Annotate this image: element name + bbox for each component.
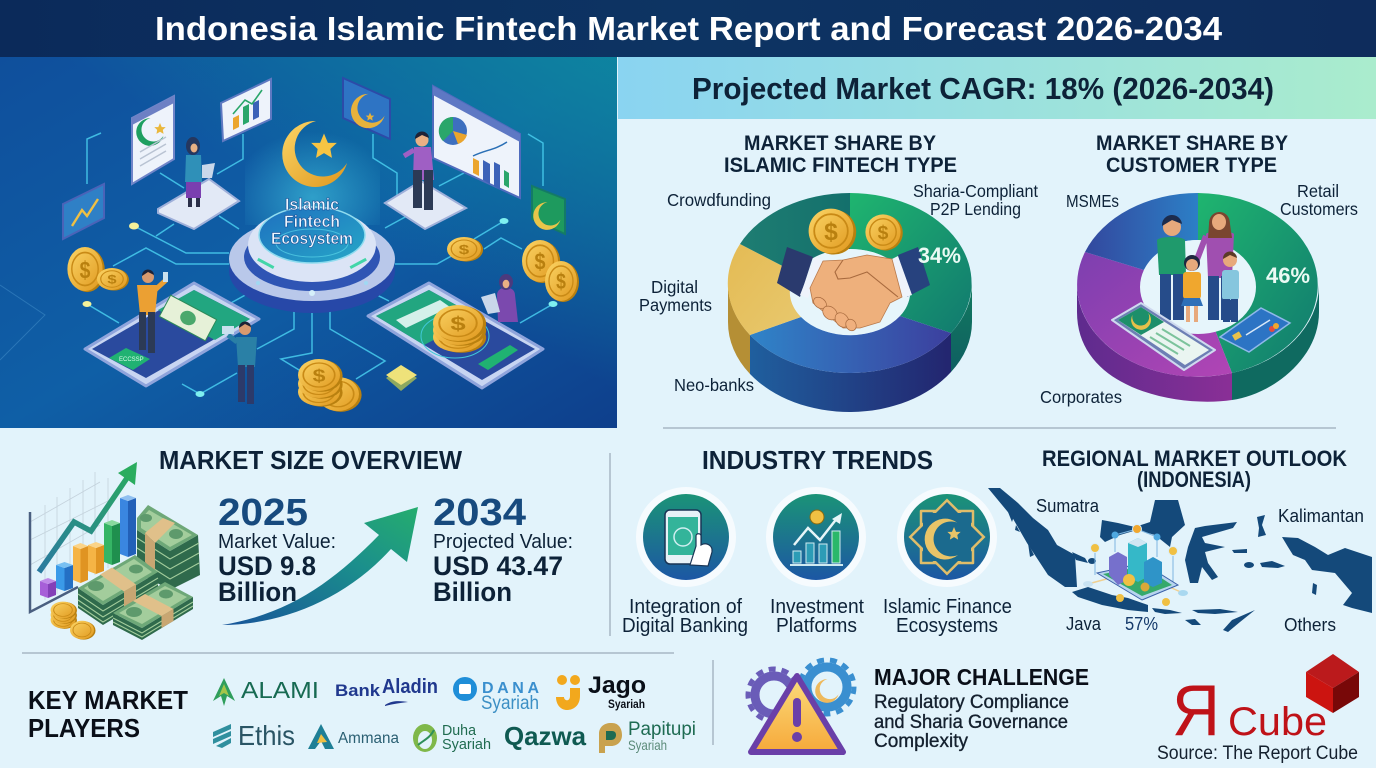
value: 46%: 46% (1266, 263, 1310, 288)
label: Integration of Digital Banking: Digital Banking (622, 615, 748, 637)
person: woman with laptop (481, 274, 518, 322)
icon: investment platforms (766, 487, 866, 587)
stat: 2034 projected value: Projected Value: (433, 531, 573, 553)
floating card: green crescent (532, 186, 565, 234)
heading (724, 132, 957, 177)
logo: Ammana: Ammana (338, 730, 399, 747)
panel: key market players (28, 672, 696, 753)
label: Digital Payments: Payments (639, 295, 712, 315)
panel: major challenge (748, 660, 1089, 752)
coins: bottom stack (298, 359, 362, 412)
label: Integration of Digital Banking (622, 596, 748, 637)
logo: RCube: Cube (1228, 700, 1327, 744)
smartphone: right: $ (450, 313, 466, 335)
panel: industry trends (622, 445, 1012, 637)
logo: DANA Syariah: Syariah (481, 693, 539, 714)
text: challenge description: and Sharia Governance (874, 712, 1068, 733)
logo: Papitupi Syariah: Papitupi (628, 719, 696, 740)
logo: ALAMI (213, 677, 319, 706)
boy (1222, 251, 1239, 322)
label: Sharia-Compliant P2P Lending: Sharia-Compliant (913, 181, 1038, 201)
logo: Jago Syariah (556, 672, 646, 711)
icon: warning with gears (748, 660, 854, 752)
smartphone: right (368, 283, 543, 388)
label: Retail Customers (1280, 181, 1358, 219)
circuit lines (87, 133, 553, 394)
label: Islamic Finance Ecosystems: Ecosystems (896, 615, 998, 637)
left person platform (158, 179, 239, 229)
woman (1196, 212, 1234, 320)
label: Neo-banks: Neo-banks (674, 375, 754, 395)
text: challenge description (874, 692, 1069, 752)
icon: family (1157, 212, 1239, 322)
heading: MARKET SHARE BY (744, 132, 936, 155)
heading: MAJOR CHALLENGE (874, 664, 1089, 690)
label: Sumatra: Sumatra (1036, 496, 1100, 516)
value: 34%: 34% (918, 243, 961, 268)
stat: 2034 projected value: Billion (433, 577, 512, 607)
heading: MARKET SHARE BY (1096, 132, 1288, 155)
icon: Islamic finance ecosystems (897, 487, 997, 587)
label: Islamic Finance Ecosystems (883, 596, 1012, 637)
label: Java: Java (1066, 614, 1102, 634)
floating card: crescent (343, 78, 390, 139)
label: Islamic Finance Ecosystems: Islamic Finance (883, 596, 1012, 618)
coin: upper right small (447, 237, 483, 262)
heading: PLAYERS (28, 713, 140, 743)
heading: (INDONESIA) (1137, 467, 1251, 492)
icon: gold coins: $ (824, 219, 838, 246)
crescent and star (282, 121, 347, 187)
person: man at bottom (222, 321, 257, 404)
heading: CUSTOMER TYPE (1106, 154, 1277, 177)
man (1157, 215, 1186, 320)
icon: mobile phone with crescent (1112, 303, 1215, 370)
logo: Jago Syariah: Syariah (608, 699, 645, 711)
label: Investment Platforms: Platforms (776, 615, 857, 637)
logo: Bank Aladin: Bank (335, 681, 381, 700)
coins: upper left (67, 247, 129, 292)
logo: ALAMI: ALAMI (241, 677, 319, 703)
stat: 2025 market value: Billion (218, 577, 297, 607)
chip (386, 365, 417, 391)
floating card: document (132, 96, 174, 184)
coin: upper right small: $ (459, 242, 469, 257)
person: man with phone (404, 131, 434, 210)
heading: KEY MARKET (28, 685, 188, 715)
logo: Ethis (213, 720, 295, 751)
logo: Ammana (308, 724, 399, 749)
panel: market share by customer type (1040, 132, 1358, 407)
heading (1096, 132, 1288, 177)
coins: upper left: $ (80, 256, 90, 283)
icon: money stacks (78, 505, 200, 640)
title banner: Indonesia Islamic Fintech Market Report and Forecast 2026-2034 (155, 10, 1223, 47)
heading (1042, 446, 1347, 492)
circuit nodes (82, 218, 558, 397)
floating card: bar chart (221, 79, 271, 141)
label: Digital Payments: Digital (651, 277, 698, 297)
label: Islamic Fintech Ecosystem: Fintech (284, 213, 340, 231)
floating card: growth line (63, 184, 104, 239)
stat: 2025 market value: USD 9.8 (218, 551, 316, 581)
logo: Bank Aladin: Aladin (382, 676, 438, 698)
donut chart: customer type (1077, 193, 1319, 402)
coins: right (522, 240, 579, 302)
icon: gold coins (809, 209, 903, 255)
logo: Papitupi Syariah: Syariah (628, 737, 667, 753)
logo: RCube: Я (1172, 671, 1220, 751)
glow beam (245, 115, 380, 225)
label: Investment Platforms (770, 596, 864, 637)
text: challenge description: Complexity (874, 731, 968, 752)
label: Sharia-Compliant P2P Lending (913, 181, 1038, 219)
heading: REGIONAL MARKET OUTLOOK (1042, 446, 1347, 471)
floating card: analytics dashboard (433, 86, 520, 198)
label: Islamic Fintech Ecosystem (271, 196, 353, 248)
icon: gold coins: $ (878, 222, 889, 244)
icon: payment card (1220, 308, 1290, 352)
logo: Jago Syariah: Jago (588, 672, 646, 699)
person: woman with tablet (185, 137, 215, 207)
stat: 2034 projected value (433, 492, 573, 607)
icon: smart city hub (1083, 524, 1188, 606)
value: 57%: 57% (1125, 614, 1158, 634)
title banner (0, 0, 1376, 57)
label: Crowdfunding: Crowdfunding (667, 190, 771, 210)
heading: MARKET SIZE OVERVIEW (159, 445, 462, 475)
smartphone: left: ECCSSP (119, 357, 144, 363)
label: Islamic Fintech Ecosystem: Islamic (285, 196, 339, 214)
panel: regional market outlook (988, 446, 1372, 635)
label: MSMEs: MSMEs (1066, 191, 1119, 211)
stack: front right (113, 582, 193, 640)
stat: 2034 projected value: USD 43.47 (433, 551, 563, 581)
logo: Duha Syariah: Duha (442, 722, 477, 739)
logo: RCube (1172, 654, 1359, 751)
CAGR banner: Projected Market CAGR: 18% (2026-2034) (692, 71, 1274, 106)
logo: Papitupi Syariah (599, 719, 696, 753)
stat: 2025 market value: Market Value: (218, 531, 336, 553)
icon: growth chart (30, 462, 137, 612)
label: Kalimantan: Kalimantan (1278, 506, 1364, 526)
map of Indonesia (988, 488, 1372, 632)
label: Digital Payments (639, 277, 712, 315)
coins: right: $ (534, 249, 546, 275)
stat: 2025 market value: 2025 (218, 492, 308, 534)
label: Integration of Digital Banking: Integration of (629, 596, 742, 618)
panel: market size overview (30, 445, 573, 640)
label: Others: Others (1284, 615, 1336, 635)
logo: Bank Aladin (335, 676, 438, 706)
icon: coins (51, 602, 96, 640)
label: Sharia-Compliant P2P Lending: P2P Lending (930, 199, 1021, 219)
panel: Islamic fintech ecosystem illustration (0, 57, 617, 428)
label: Retail Customers: Customers (1280, 199, 1358, 219)
heading (28, 685, 188, 743)
panel: market share by Islamic fintech type (639, 132, 1038, 412)
donut chart: fintech type (728, 193, 972, 412)
label: Retail Customers: Retail (1297, 181, 1339, 201)
arrow: growth from 2025 to 2034 (222, 507, 418, 625)
coins: bottom stack: $ (313, 366, 326, 386)
label: Islamic Fintech Ecosystem: Ecosystem (271, 230, 353, 248)
stat: 2034 projected value: 2034 (433, 492, 526, 534)
logo: DANA Syariah: DANA (482, 680, 539, 697)
label: Corporates: Corporates (1040, 387, 1122, 407)
logo: Ethis: Ethis (238, 720, 295, 751)
right person platform (385, 181, 466, 229)
CAGR banner (618, 57, 1376, 119)
logo: Duha Syariah: Syariah (442, 736, 491, 753)
logo: Duha Syariah (413, 722, 491, 753)
label: Investment Platforms: Investment (770, 596, 864, 618)
stat: 2025 market value (218, 492, 336, 607)
girl (1181, 255, 1203, 322)
central platform (229, 207, 395, 313)
text: challenge description: Regulatory Compliance (874, 692, 1069, 713)
icon: handshake (777, 247, 930, 333)
heading: ISLAMIC FINTECH TYPE (724, 154, 957, 177)
stack: front left (78, 555, 158, 625)
stack: back (137, 505, 200, 590)
coins: upper left: $ (107, 273, 117, 287)
smartphone: left (85, 283, 259, 386)
icon: digital banking (636, 487, 736, 587)
source line: Source: The Report Cube (1157, 743, 1358, 764)
coins: right: $ (556, 270, 566, 295)
logo: DANA Syariah (453, 677, 539, 714)
logo: Qazwa: Qazwa (504, 721, 587, 751)
person: man standing on phone (137, 269, 168, 353)
heading: INDUSTRY TRENDS (702, 445, 933, 475)
